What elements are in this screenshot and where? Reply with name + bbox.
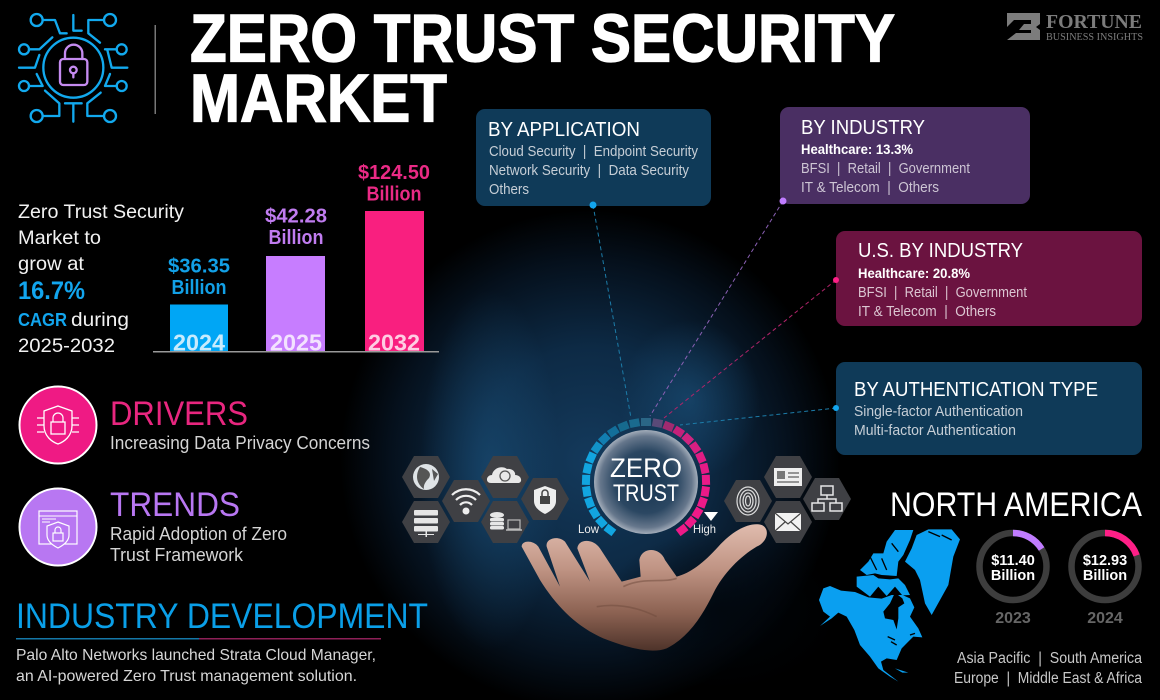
- gauge: zero trust: High: [693, 522, 716, 536]
- title: ZERO TRUST SECURITY: [190, 0, 895, 76]
- icon: mail: [764, 501, 812, 543]
- panel: by application: [476, 109, 711, 208]
- panel: by application: Network Security | Data Security: [489, 163, 690, 179]
- bar chart: 2032: [368, 330, 420, 356]
- panel: by authentication type: Multi-factor Authentication: [854, 423, 1016, 439]
- connector: authentication: [680, 408, 836, 425]
- logo: Fortune Business Insights: FORTUNE: [1046, 11, 1142, 33]
- connector: industry: [650, 201, 783, 416]
- logo: Fortune Business Insights: BUSINESS INSIGHTS: [1046, 32, 1143, 43]
- panel: by authentication type: [833, 362, 1142, 455]
- logo: Fortune Business Insights: [1007, 11, 1143, 43]
- text block: CAGR statement: during: [71, 309, 129, 331]
- panel: industry development: Palo Alto Networks launched Strata Cloud Manager,: [16, 647, 376, 664]
- text block: CAGR statement: [18, 201, 184, 357]
- hexagon icons: left cluster: [402, 456, 569, 543]
- gauge label: zero trust: TRUST: [613, 480, 679, 507]
- panel: trends: Trust Framework: [110, 545, 244, 565]
- icon: wifi: [442, 480, 490, 522]
- bar chart: 2024: [173, 330, 225, 356]
- icon: circuit padlock: [19, 14, 127, 122]
- gauge segments: [582, 418, 710, 536]
- icon: fingerprint: [724, 480, 772, 522]
- panel: north america: [819, 486, 1142, 687]
- gauge: zero trust: [578, 418, 718, 536]
- gauge label: zero trust: [610, 453, 682, 507]
- donut: 2024: 2024: [1087, 610, 1123, 627]
- panel: by authentication type: Single-factor Authentication: [854, 404, 1023, 420]
- title: MARKET: [190, 60, 447, 136]
- bar chart: Billion: [172, 276, 226, 299]
- text block: CAGR statement: CAGR: [18, 310, 67, 330]
- connector: US industry: [664, 280, 836, 418]
- donut: 2023: 2023: [995, 610, 1031, 627]
- panel: US by industry: BFSI | Retail | Government: [858, 285, 1027, 301]
- panel: by application: BY APPLICATION: [488, 119, 640, 141]
- panel: US by industry: Healthcare: 20.8%: [858, 265, 971, 281]
- donut: 2024: [1072, 533, 1138, 627]
- panel: by industry: Healthcare: 13.3%: [801, 141, 914, 157]
- sphere: [594, 430, 698, 534]
- panel: US by industry: [833, 231, 1142, 326]
- icon: shield circuit: [20, 386, 96, 464]
- icon: network: [803, 478, 851, 520]
- regions list: [954, 650, 1142, 687]
- regions list: Asia Pacific | South America: [957, 650, 1142, 667]
- gauge: zero trust: Low: [578, 522, 599, 536]
- bar chart: Billion: [366, 182, 422, 206]
- text block: CAGR statement: grow at: [18, 253, 85, 275]
- map: north america: [819, 529, 960, 682]
- panel: trends: TRENDS: [110, 486, 240, 524]
- panel: drivers: Increasing Data Privacy Concerns: [110, 433, 370, 453]
- bar chart: $124.50: [358, 161, 430, 184]
- panel: industry development: INDUSTRY DEVELOPMENT: [16, 597, 428, 636]
- hexagon icons: right cluster: [724, 456, 851, 522]
- donut: 2023: [980, 533, 1046, 627]
- regions list: Europe | Middle East & Africa: [954, 670, 1142, 687]
- connector: application: [593, 205, 631, 418]
- panel: industry development: [16, 597, 428, 685]
- panel: by application: Others: [489, 182, 529, 198]
- panel: by industry: [780, 107, 1030, 204]
- donut: 2023: Billion: [991, 568, 1035, 584]
- donut: 2024: Billion: [1083, 568, 1127, 584]
- text block: CAGR statement: 2025-2032: [18, 335, 115, 357]
- illustration: open hand: [522, 524, 767, 651]
- icon: cloud: [481, 456, 529, 498]
- icon: shield lock: [521, 478, 569, 520]
- bar chart: $42.28: [265, 204, 327, 228]
- icon: globe: [402, 456, 450, 498]
- panel: by industry: BFSI | Retail | Government: [801, 161, 970, 177]
- icon: browser shield: [20, 488, 96, 566]
- donut: 2024: $12.93: [1083, 553, 1127, 569]
- text block: CAGR statement: Zero Trust Security: [18, 201, 184, 223]
- bar chart: 2025: [270, 330, 322, 356]
- bar chart: Billion: [268, 226, 324, 249]
- panel: by authentication type: BY AUTHENTICATION TYPE: [854, 379, 1098, 401]
- panel: trends: [20, 486, 287, 566]
- panel: US by industry: IT & Telecom | Others: [858, 304, 996, 320]
- icon: database: [481, 501, 529, 543]
- panel: drivers: DRIVERS: [110, 395, 248, 433]
- icon: server: [402, 501, 450, 543]
- bar chart: [153, 161, 439, 356]
- donut: 2023: $11.40: [991, 553, 1035, 569]
- panel: US by industry: U.S. BY INDUSTRY: [858, 240, 1023, 262]
- panel: by application: Cloud Security | Endpoint Security: [489, 144, 699, 160]
- panel: by industry: BY INDUSTRY: [801, 117, 925, 139]
- panel: drivers: [20, 386, 370, 464]
- title: [190, 0, 895, 136]
- icon: id card: [764, 456, 812, 498]
- text block: CAGR statement: Market to: [18, 227, 101, 249]
- bar chart: $36.35: [168, 254, 230, 278]
- panel: by industry: IT & Telecom | Others: [801, 180, 939, 196]
- gauge label: zero trust: ZERO: [610, 453, 682, 483]
- panel: industry development: an AI-powered Zero Trust management solution.: [16, 668, 357, 685]
- divider line: [154, 25, 156, 114]
- text block: CAGR statement: 16.7%: [18, 277, 85, 305]
- panel: trends: Rapid Adoption of Zero: [110, 524, 287, 544]
